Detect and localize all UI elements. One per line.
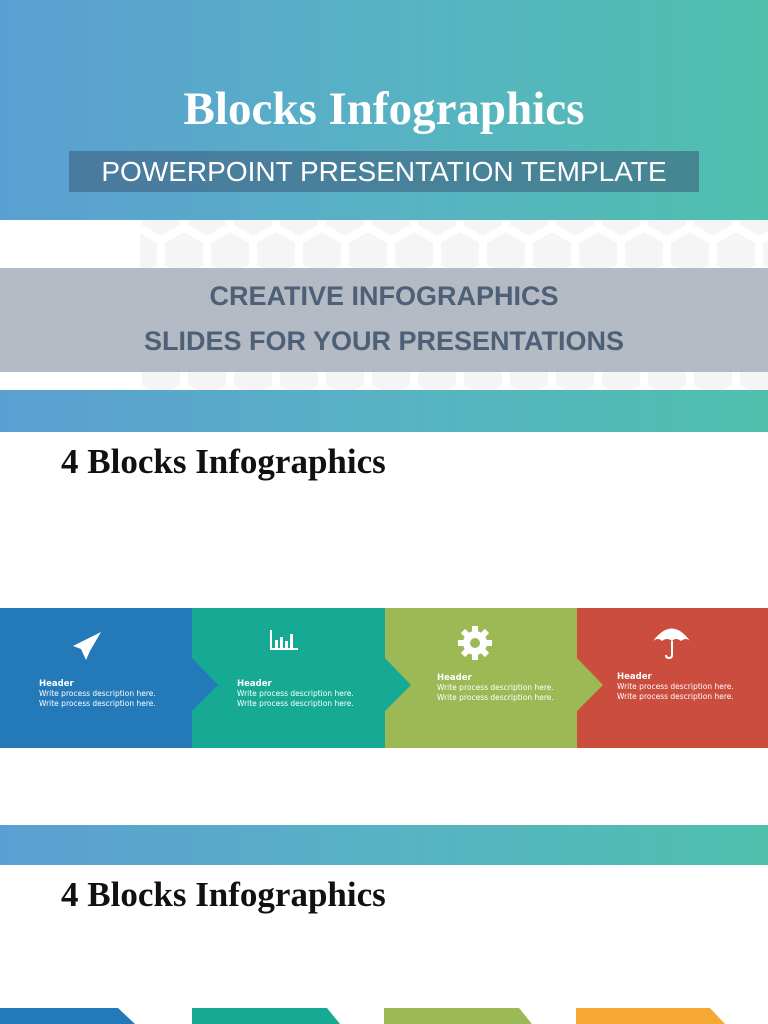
block 4 red (577, 608, 768, 748)
block 2 teal: Header (237, 679, 272, 689)
block 2 teal (192, 608, 385, 748)
gray banner (0, 268, 768, 372)
block 3 green (385, 608, 578, 748)
block 4 red: Write process description here. Write process description here. (617, 682, 734, 701)
block 1 blue (0, 608, 193, 748)
hex pattern background (140, 220, 768, 390)
block 2 teal: Write process description here. Write process description here. (237, 689, 354, 708)
block 4 red: Header (617, 672, 652, 682)
gray banner: SLIDES FOR YOUR PRESENTATIONS (144, 326, 624, 356)
blocks row (0, 608, 768, 748)
block 3 green: Header (437, 673, 472, 683)
gradient band 2 (0, 825, 768, 865)
header banner (0, 0, 768, 220)
arrows and icons (73, 626, 690, 711)
icon chart (270, 630, 298, 650)
subtitle box (69, 151, 699, 192)
bottom tabs (0, 1008, 725, 1024)
icon umbrella (653, 628, 690, 659)
icon plane (73, 632, 101, 660)
heading 2: 4 Blocks Infographics (61, 875, 386, 914)
block 3 green: Write process description here. Write process description here. (437, 683, 554, 702)
gradient band 1 (0, 390, 768, 432)
heading 1: 4 Blocks Infographics (61, 442, 386, 481)
gray banner: CREATIVE INFOGRAPHICS (209, 281, 559, 311)
icon gear (458, 626, 492, 660)
subtitle box: POWERPOINT PRESENTATION TEMPLATE (101, 156, 667, 187)
block 1 blue: Header (39, 679, 74, 689)
block 1 blue: Write process description here. Write process description here. (39, 689, 156, 708)
title: Blocks Infographics (184, 83, 584, 135)
